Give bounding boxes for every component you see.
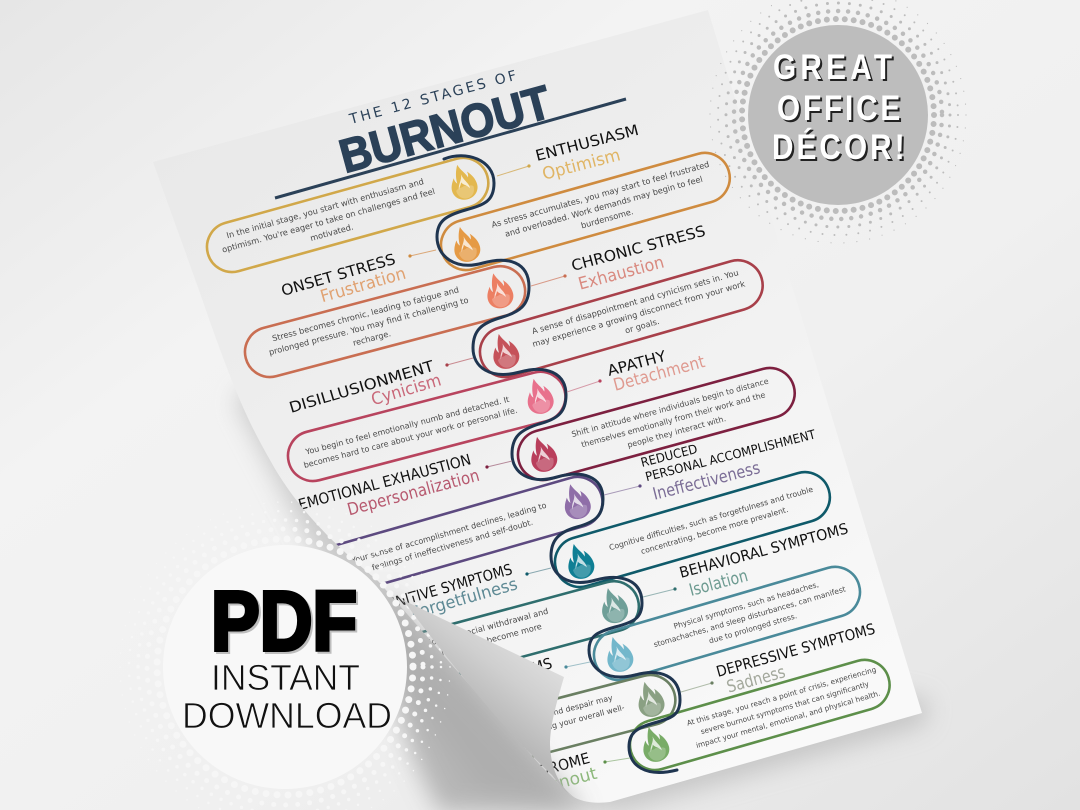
card 10: behavioral symptoms: due to prolonged stress.	[708, 611, 798, 645]
card 12: depressive symptoms: At this stage, you reach a point of crisis, experiencing	[686, 665, 877, 728]
label: physical symptoms: PHYSICAL SYMPTOMS	[405, 654, 554, 713]
label: burnout syndrome: BURNOUT SYNDROME	[436, 749, 592, 807]
card 2: optimism	[435, 147, 736, 276]
badge: great office decor: OFFICE	[777, 89, 900, 128]
card 1: enthusiasm: In the initial stage, you start with enthusiasm and	[225, 176, 425, 240]
card 11: physical symptoms: being.	[507, 740, 533, 755]
label: reduced personal accomplishment: PERSONAL ACCOMPLISHMENT	[644, 426, 817, 484]
label: burnout syndrome	[540, 752, 598, 787]
label: behavioral symptoms: Isolation	[687, 566, 750, 601]
curl shadow	[384, 590, 585, 810]
label: disillusionment: Cynicism	[369, 371, 444, 410]
card 7: emotional exhaustion: feelings of ineffectiveness and self-doubt.	[371, 518, 534, 572]
badge: pdf instant download	[120, 502, 450, 810]
card 8: reduced personal accomplishment	[549, 466, 836, 593]
card 4: chronic stress	[474, 254, 769, 383]
badge: great office decor: GREAT	[775, 50, 894, 89]
card 9: cognitive symptoms: irritability as you become more	[416, 621, 543, 664]
poster contents	[201, 68, 895, 810]
card 12: depressive symptoms	[630, 658, 891, 771]
badge: pdf instant download: PDF	[211, 574, 357, 668]
card 5: disillusionment: becomes hard to care about your work or personal life.	[303, 406, 518, 470]
label: behavioral symptoms	[680, 523, 848, 596]
card 3: onset stress: recharge.	[352, 328, 392, 348]
title: burnout: BURNOUT	[334, 75, 556, 183]
label: emotional exhaustion: Depersonalization	[345, 466, 482, 520]
label: onset stress: ONSET STRESS	[279, 250, 398, 300]
label: enthusiasm: ENTHUSIASM	[533, 121, 641, 165]
label: emotional exhaustion: EMOTIONAL EXHAUSTION	[296, 450, 473, 514]
card 3: onset stress: Stress becomes chronic, leading to fatigue and	[271, 284, 460, 343]
label: behavioral symptoms: BEHAVIORAL SYMPTOMS	[677, 519, 850, 582]
card 12: depressive symptoms: impact your mental, emotional, and physical health.	[695, 689, 881, 750]
label: depressive symptoms: Sadness	[725, 662, 788, 698]
card 4: chronic stress: A sense of disappointment and cynicism sets in. You	[531, 267, 740, 336]
label: apathy: APATHY	[605, 347, 669, 380]
label: cognitive symptoms: Forgetfulness	[409, 574, 520, 624]
badge: great office decor: OFFICE	[779, 91, 902, 130]
label: cognitive symptoms: COGNITIVE SYMPTOMS	[365, 560, 514, 619]
card 5: disillusionment	[286, 370, 564, 482]
label: reduced personal accomplishment	[640, 429, 814, 500]
card 7: emotional exhaustion: Your sense of accomplishment declines, leading to	[350, 501, 548, 566]
card 10: behavioral symptoms: stomachaches, and sleep disturbances, can manifest	[652, 584, 847, 649]
card 3: onset stress	[239, 261, 531, 383]
card 9: cognitive symptoms: Behaviors like social withdrawal and	[403, 606, 549, 654]
card 3: onset stress: prolonged pressure. You may find it challenging to	[268, 295, 469, 357]
label: burnout syndrome: Burnout	[528, 764, 600, 801]
badge: great office decor: GREAT	[773, 48, 892, 87]
card 8: reduced personal accomplishment: Cognitive difficulties, such as forgetfulness and trouble	[608, 485, 814, 552]
label: reduced personal accomplishment: Ineffectiveness	[651, 458, 762, 505]
card 12: depressive symptoms: severe burnout symptoms that can significantly	[700, 679, 871, 736]
card 2: optimism: and overloaded. Work demands may begin to feel	[504, 174, 704, 239]
label: onset stress: Frustration	[318, 264, 408, 307]
badge: great office decor: DÉCOR!	[774, 129, 907, 169]
card 6: apathy	[512, 362, 800, 486]
paper shadow	[235, 350, 930, 810]
label: depressive symptoms: DEPRESSIVE SYMPTOMS	[714, 620, 877, 681]
card 6: apathy: Shift in attitude where individuals begin to distance	[571, 377, 770, 439]
label: depressive symptoms	[716, 623, 875, 692]
title: the 12 stages of: THE 12 STAGES OF	[347, 68, 518, 128]
serpentine path	[437, 156, 680, 772]
title rule	[275, 99, 626, 198]
label: cognitive symptoms	[392, 564, 518, 615]
label: enthusiasm: Optimism	[540, 145, 623, 185]
card 2: optimism: As stress accumulates, you may start to feel frustrated	[490, 159, 710, 230]
label: apathy: Detachment	[611, 352, 707, 396]
card 10: behavioral symptoms	[592, 566, 862, 682]
label: enthusiasm	[536, 124, 638, 180]
card 2: optimism: burdensome.	[580, 206, 634, 230]
badge: pdf instant download: INSTANT	[211, 657, 360, 698]
card 11: physical symptoms: may become overwhelming, impacting your overall well-	[408, 703, 626, 768]
label: chronic stress: CHRONIC STRESS	[569, 222, 707, 275]
card 9: cognitive symptoms	[422, 580, 640, 675]
card 11: physical symptoms	[526, 674, 677, 758]
label: reduced personal accomplishment: REDUCED	[639, 441, 699, 470]
card 1: enthusiasm	[201, 152, 494, 278]
card 1: enthusiasm: optimism. You're eager to take on challenges and feel	[221, 186, 436, 255]
card 5: disillusionment: You begin to feel emotionally numb and detached. It	[304, 395, 510, 457]
card 4: chronic stress: may experience a growing disconnect from your work	[531, 278, 746, 349]
label: disillusionment: DISILLUSIONMENT	[287, 357, 437, 417]
card 4: chronic stress: or goals.	[624, 316, 660, 335]
badge: great office decor	[710, 0, 966, 243]
card 6: apathy: people they interact with.	[626, 414, 727, 450]
card 7: emotional exhaustion	[336, 476, 602, 584]
badge: pdf instant download: PDF	[213, 576, 359, 670]
card 6: apathy: themselves emotionally from their work and the	[580, 390, 767, 449]
poster sheet	[153, 10, 922, 803]
card 10: behavioral symptoms: Physical symptoms, such as headaches,	[673, 580, 820, 631]
page curl flap	[403, 600, 580, 801]
connectors	[408, 164, 714, 764]
card 1: enthusiasm: motivated.	[309, 222, 354, 243]
card 11: physical symptoms: Feelings of sadness, hopelessness, and despair may	[414, 693, 614, 753]
label: chronic stress: Exhaustion	[576, 253, 666, 295]
badge: great office decor: DÉCOR!	[772, 127, 905, 167]
badge: pdf instant download: DOWNLOAD	[182, 695, 392, 736]
card 8: reduced personal accomplishment: concentrating, become more prevalent.	[640, 505, 789, 556]
